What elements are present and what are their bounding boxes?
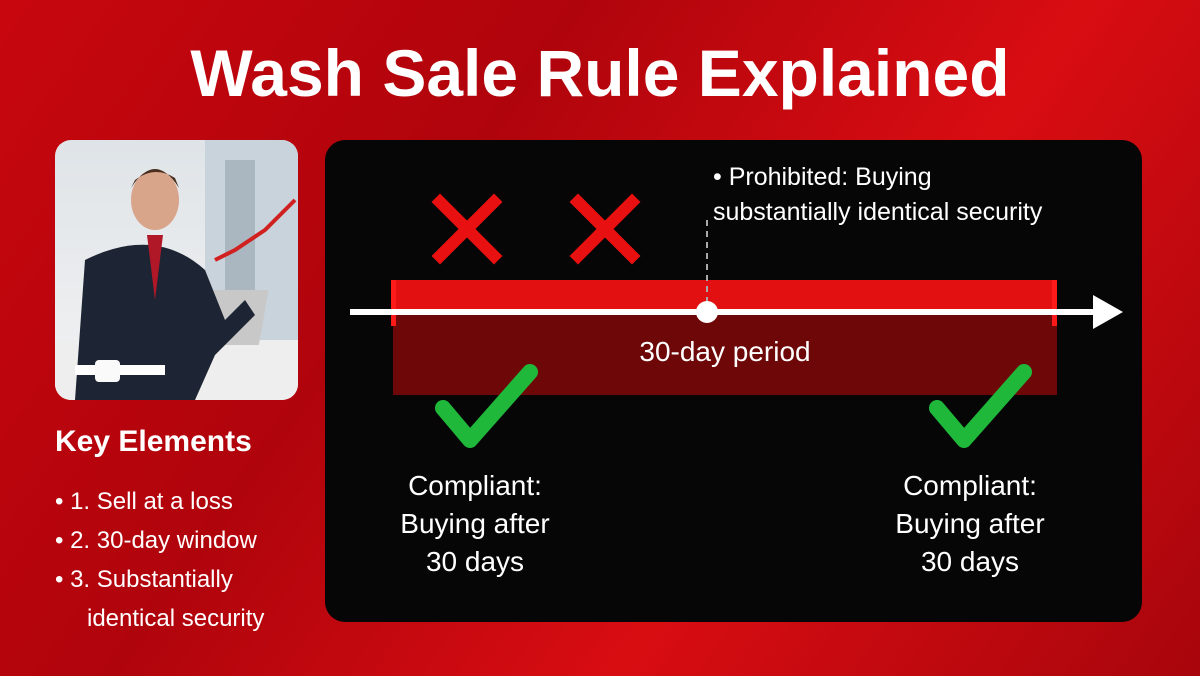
arrow: timeline	[350, 295, 1123, 329]
list: key elements: • 1. Sell at a loss	[55, 488, 233, 515]
text: compliant left: 30 days	[426, 546, 524, 577]
text: compliant right	[895, 470, 1045, 577]
icon: X marks	[440, 202, 632, 256]
title: Wash Sale Rule Explained	[190, 36, 1010, 110]
text: prohibited	[713, 163, 1042, 226]
list: key elements	[55, 488, 264, 632]
dark red period box	[393, 312, 1057, 395]
photo: businessman at laptop	[55, 140, 298, 400]
text: compliant left	[400, 470, 550, 577]
timeline dot	[696, 301, 718, 323]
dashed line	[706, 220, 708, 305]
panel: timeline	[325, 140, 1142, 622]
text: compliant left: Compliant:	[408, 470, 542, 501]
text: prohibited: substantially identical security	[713, 198, 1042, 226]
red bar	[391, 280, 1057, 326]
list: key elements: • 2. 30-day window	[55, 527, 257, 554]
text: compliant left: Buying after	[400, 508, 550, 539]
icon: check marks	[443, 372, 1024, 440]
list: key elements: identical security	[87, 605, 264, 632]
heading: Key Elements: Key Elements	[55, 425, 252, 458]
text: compliant right: Buying after	[895, 508, 1045, 539]
text: 30-day period: 30-day period	[639, 336, 811, 367]
text: compliant right: 30 days	[921, 546, 1019, 577]
list: key elements: • 3. Substantially	[55, 566, 233, 593]
text: prohibited: • Prohibited: Buying	[713, 163, 932, 191]
text: compliant right: Compliant:	[903, 470, 1037, 501]
